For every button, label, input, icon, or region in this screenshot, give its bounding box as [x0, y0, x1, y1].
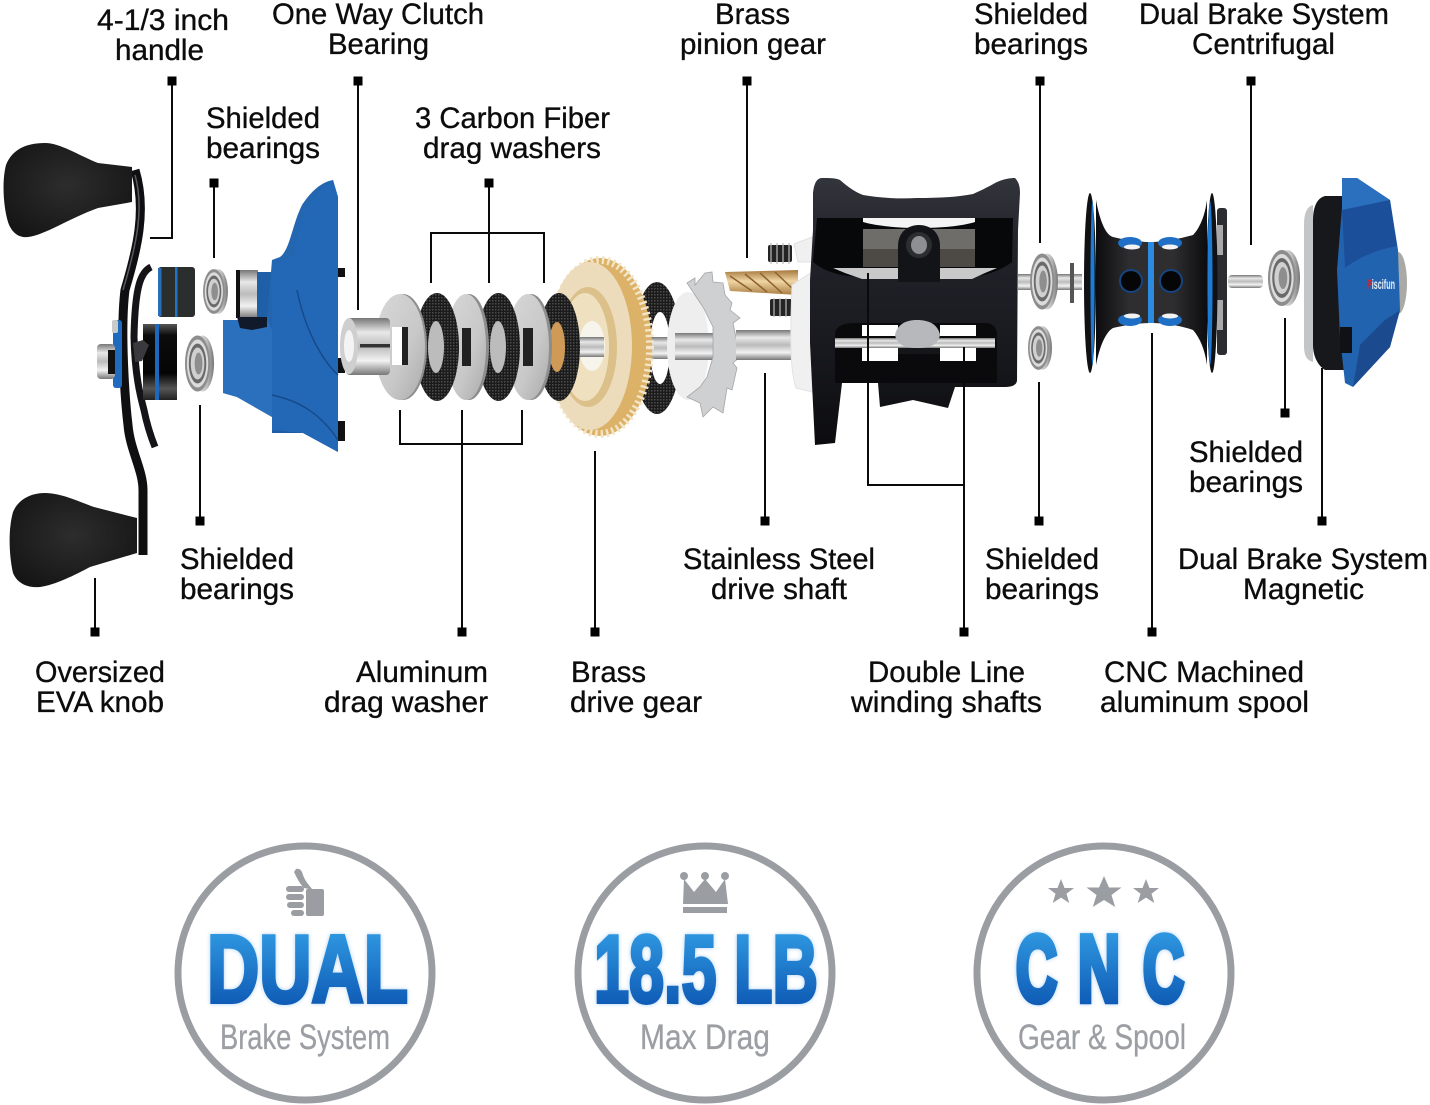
- label: one way clutch bearing: Bearing: [328, 28, 429, 61]
- one way clutch bearing: [340, 318, 390, 375]
- bearing: upper right: [1030, 254, 1058, 310]
- icon: thumbs up: [286, 869, 324, 916]
- label: double line winding shafts: Double Line: [868, 656, 1025, 689]
- value: C: [1143, 916, 1184, 1021]
- label: carbon fiber washers: 3 Carbon Fiber: [415, 102, 610, 135]
- label: stainless steel drive shaft: Stainless Steel: [683, 543, 875, 576]
- value: DUAL: [207, 916, 408, 1023]
- exploded reel: [4, 143, 1407, 587]
- caption: Gear & Spool: [1018, 1018, 1186, 1057]
- bearing: lower right: [1028, 326, 1052, 370]
- label: double line winding shafts: winding shafts: [850, 686, 1042, 719]
- caption: Max Drag: [640, 1018, 770, 1057]
- shaft: [1018, 263, 1082, 303]
- caption: Brake System: [220, 1018, 390, 1057]
- icon: top knob: [4, 143, 132, 237]
- value: N: [1078, 916, 1120, 1021]
- handle arm with knobs: [4, 143, 155, 587]
- label: shielded bearings lower right: bearings: [985, 573, 1099, 606]
- main frame: [810, 178, 1020, 445]
- label: handle: 4-1/3 inch: [97, 4, 229, 37]
- icon: crown: [680, 872, 729, 913]
- gear back washers and shaft: [633, 272, 792, 417]
- magnetic cover: [1304, 178, 1407, 387]
- label: shielded bearings top right: bearings: [974, 28, 1088, 61]
- label: brass pinion gear: pinion gear: [680, 28, 826, 61]
- label: EVA knob: Oversized: [35, 656, 165, 689]
- label: shielded bearings lower right: Shielded: [985, 543, 1099, 576]
- badge: CNC gear and spool: [977, 846, 1231, 1100]
- value: 18.5 LB: [594, 916, 818, 1023]
- knurled ring: [158, 267, 195, 317]
- value: C: [1016, 916, 1057, 1021]
- label: shielded bearings upper left: bearings: [206, 132, 320, 165]
- label: shielded bearings upper left: Shielded: [206, 102, 320, 135]
- silver washer 2: [446, 294, 489, 400]
- ratchet: [687, 272, 740, 417]
- brand logo: Piscifun: [1367, 276, 1395, 292]
- icon: stars: [1048, 876, 1159, 907]
- side plate: [223, 180, 345, 452]
- label: aluminum drag washer: drag washer: [324, 686, 488, 719]
- label: shielded bearings right: Shielded: [1189, 436, 1303, 469]
- label: centrifugal brake: Centrifugal: [1192, 28, 1335, 61]
- bearing: centrifugal side: [1268, 250, 1300, 306]
- label: handle: handle: [115, 34, 204, 67]
- label: EVA knob: EVA knob: [36, 686, 164, 719]
- handle hub: [97, 320, 177, 400]
- label: aluminum drag washer: Aluminum: [356, 656, 488, 689]
- icon: bottom knob: [10, 493, 137, 587]
- plastic gear: [791, 237, 812, 392]
- silver washer 1: [375, 294, 427, 400]
- carbon washer 1: [415, 293, 459, 401]
- carbon washer 3: [538, 293, 580, 401]
- bearing: lower left: [185, 336, 214, 392]
- bearing: upper left: [203, 269, 228, 314]
- label: magnetic brake: Magnetic: [1243, 573, 1364, 606]
- label: shielded bearings lower left: bearings: [180, 573, 294, 606]
- drive gear: [548, 258, 652, 436]
- badge: max drag: [578, 846, 832, 1100]
- carbon washer 2: [477, 293, 520, 401]
- label: brass drive gear: Brass: [571, 656, 646, 689]
- label: shielded bearings lower left: Shielded: [180, 543, 294, 576]
- silver washer 3: [507, 294, 552, 400]
- label: brass drive gear: drive gear: [570, 686, 702, 719]
- label: carbon fiber washers: drag washers: [423, 132, 601, 165]
- spool: [1084, 193, 1263, 373]
- badge: dual brake system: [178, 846, 432, 1100]
- label: shielded bearings right: bearings: [1189, 466, 1303, 499]
- label: CNC aluminum spool: aluminum spool: [1100, 686, 1309, 719]
- leader lines: [90, 76, 1326, 636]
- pinion gear and springs: [725, 243, 798, 317]
- label: CNC aluminum spool: CNC Machined: [1104, 656, 1304, 689]
- label: stainless steel drive shaft: drive shaft: [711, 573, 848, 606]
- label: magnetic brake: Dual Brake System: [1178, 543, 1428, 576]
